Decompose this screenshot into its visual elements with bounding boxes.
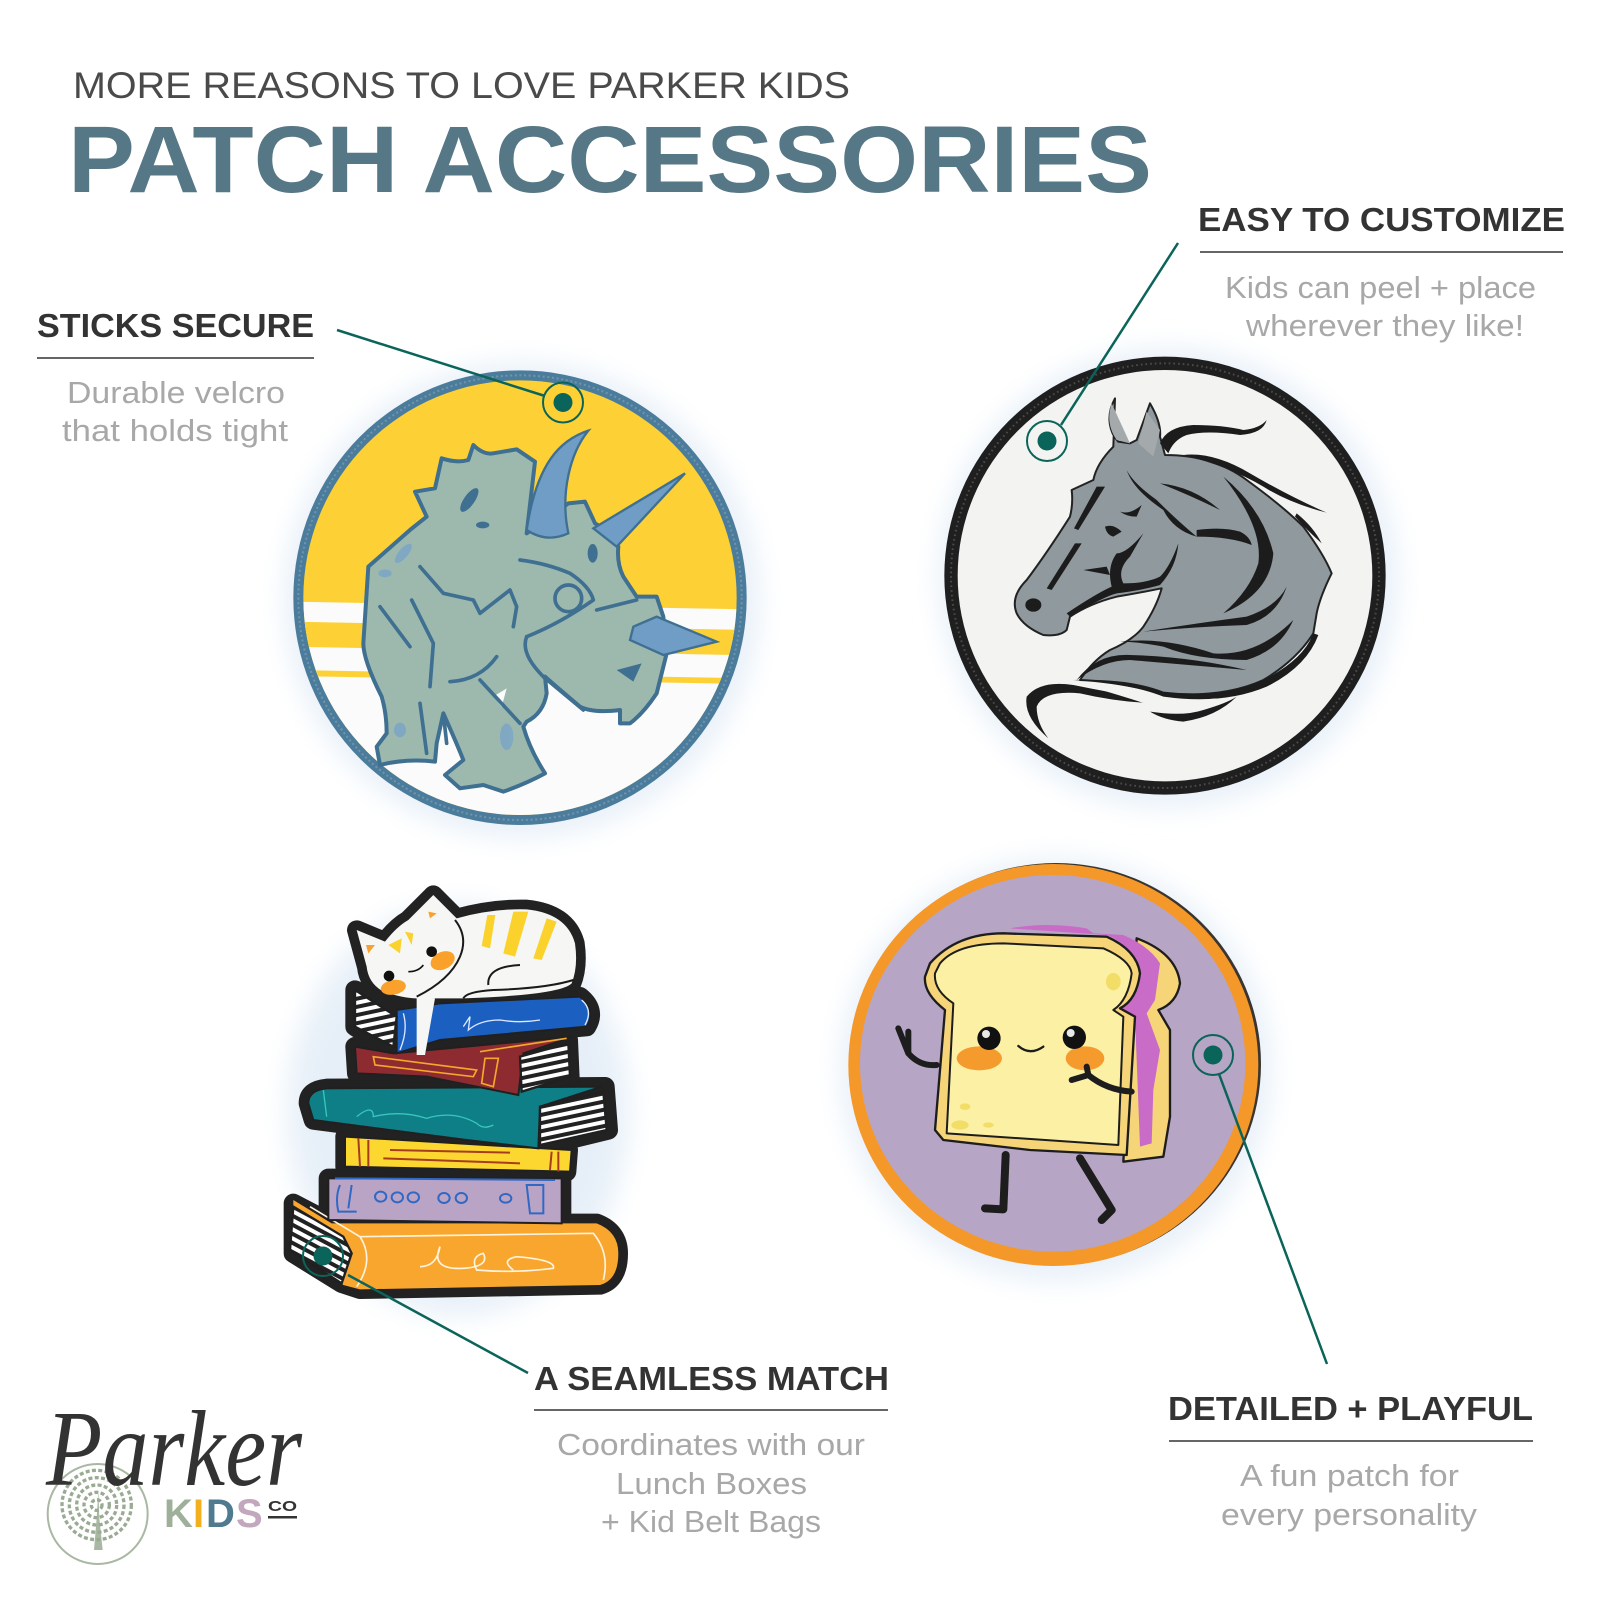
marker xyxy=(1193,1035,1233,1075)
patch: cat on books xyxy=(290,895,618,1289)
soft shadows behind patches xyxy=(286,350,1396,1315)
yellow book xyxy=(345,1137,572,1172)
cat xyxy=(357,895,576,1055)
heading: EASY TO CUSTOMIZE xyxy=(1198,202,1565,239)
wordmark: KIDS: K xyxy=(164,1492,193,1536)
teal book xyxy=(308,1087,607,1148)
logo: Parker Kids Co xyxy=(45,1390,303,1564)
marker xyxy=(1027,421,1067,461)
description: Coordinates with our xyxy=(557,1427,865,1462)
description xyxy=(62,375,288,448)
title block xyxy=(68,65,1152,213)
description: wherever they like! xyxy=(1245,308,1524,343)
wordmark: CO: CO xyxy=(268,1498,297,1515)
wordmark: Parker: Parker xyxy=(45,1390,303,1509)
description: Lunch Boxes xyxy=(616,1466,807,1501)
description xyxy=(1225,270,1536,343)
face and limbs xyxy=(898,1026,1132,1220)
description: that holds tight xyxy=(62,413,288,448)
leader line xyxy=(337,330,545,396)
marker xyxy=(303,1236,343,1276)
lavender book xyxy=(328,1178,562,1223)
heading: DETAILED + PLAYFUL xyxy=(1168,1391,1533,1428)
description: Kids can peel + place xyxy=(1225,270,1536,305)
marker xyxy=(543,382,583,422)
leader line xyxy=(1219,1074,1327,1364)
subtitle: MORE REASONS TO LOVE PARKER KIDS xyxy=(73,65,850,106)
leader line xyxy=(1061,243,1178,425)
blue book xyxy=(355,990,590,1053)
description xyxy=(1221,1458,1478,1532)
wordmark: KIDS: S xyxy=(236,1492,263,1536)
callout: easy to customize xyxy=(1027,202,1565,461)
horse head xyxy=(1015,398,1332,738)
callout: a seamless match xyxy=(303,1236,889,1539)
patch: sandwich xyxy=(848,863,1261,1266)
wordmark: KIDS: I xyxy=(193,1492,204,1536)
main heading: PATCH ACCESSORIES xyxy=(68,107,1152,213)
patch: horse xyxy=(944,357,1386,795)
callout: sticks secure xyxy=(37,308,583,448)
orange book xyxy=(290,1200,618,1289)
wordmark: CO xyxy=(268,1498,297,1518)
description: Durable velcro xyxy=(67,375,285,410)
description: every personality xyxy=(1221,1497,1478,1532)
icon: tree in circle xyxy=(48,1464,148,1564)
red book xyxy=(355,1037,573,1095)
heading: STICKS SECURE xyxy=(37,308,314,345)
wordmark: KIDS: D xyxy=(206,1492,235,1536)
patch: triceratops xyxy=(290,370,757,837)
leader line xyxy=(348,1275,528,1373)
callout: detailed + playful xyxy=(1168,1035,1533,1532)
description: A fun patch for xyxy=(1240,1458,1459,1493)
description xyxy=(557,1427,865,1539)
heading: A SEAMLESS MATCH xyxy=(534,1361,889,1398)
description: + Kid Belt Bags xyxy=(601,1504,821,1539)
